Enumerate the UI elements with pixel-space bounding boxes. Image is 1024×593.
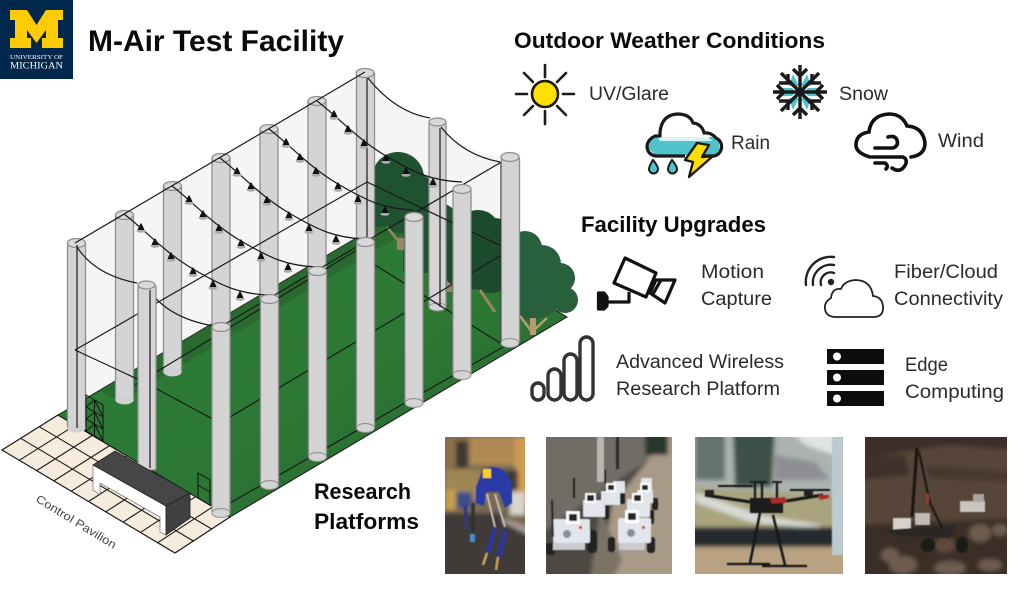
label: Edge Computing: Computing [905, 382, 1004, 403]
icon: edge servers [827, 349, 884, 406]
middle row poles [429, 118, 446, 311]
icon: sun [516, 65, 574, 124]
front row poles [212, 152, 520, 518]
label: Edge Computing [905, 355, 1004, 403]
label: Motion Capture: Motion [701, 262, 764, 283]
small gate [198, 473, 210, 505]
icon: wind cloud [856, 114, 925, 170]
label: Fiber/Cloud Connectivity [894, 262, 1004, 310]
green field [58, 215, 567, 517]
photo: bipedal robot [445, 437, 525, 574]
photo: drone [695, 437, 843, 574]
logo: University of Michigan: UNIVERSITY OF [10, 54, 63, 61]
photo: rover fleet [546, 437, 672, 574]
label: Advanced Wireless Research Platform: Advanced Wireless [616, 352, 784, 373]
logo: University of Michigan: MICHIGAN [10, 60, 64, 70]
tile plaza [2, 415, 230, 553]
label: Wind: Wind [938, 131, 984, 152]
label: Advanced Wireless Research Platform [616, 352, 784, 400]
icon: motion capture camera [598, 258, 675, 309]
tree: middle [440, 210, 515, 312]
label: Motion Capture: Capture [701, 289, 772, 310]
facility illustration [2, 68, 578, 553]
tree: back [356, 152, 460, 292]
back row poles [68, 68, 374, 432]
icon: rain cloud [647, 114, 722, 177]
darker back strip of field [100, 215, 415, 402]
cables and lights [75, 72, 510, 503]
label: Rain: Rain [731, 133, 770, 154]
control pavilion label: Control Pavilion [33, 493, 118, 552]
icon: signal bars [532, 337, 593, 400]
heading: research platforms: Research [314, 479, 411, 504]
heading: research platforms: Platforms [314, 509, 419, 534]
label: Motion Capture [701, 262, 772, 310]
label: UV/Glare: UV/Glare [589, 84, 669, 105]
heading: outdoor weather conditions: Outdoor Weather Conditions [514, 28, 825, 53]
photo: soil rover [865, 437, 1007, 574]
label: Advanced Wireless Research Platform: Research Platform [616, 379, 780, 400]
net enclosure [58, 72, 510, 430]
logo: University of Michigan [0, 0, 73, 79]
label: Fiber/Cloud Connectivity: Connectivity [894, 289, 1004, 310]
icon: snowflake [773, 65, 827, 119]
title: M-Air Test Facility [88, 25, 344, 58]
lattice tower [86, 395, 103, 441]
heading: research platforms [314, 479, 419, 534]
label: Edge Computing: Edge [905, 355, 948, 376]
control pavilion [93, 451, 190, 535]
tree: front right [503, 231, 578, 335]
label: Fiber/Cloud Connectivity: Fiber/Cloud [894, 262, 998, 283]
heading: facility upgrades: Facility Upgrades [581, 212, 766, 237]
middle corner pole [138, 281, 156, 470]
icon: wifi cloud [806, 257, 883, 317]
label: Snow: Snow [839, 84, 888, 105]
